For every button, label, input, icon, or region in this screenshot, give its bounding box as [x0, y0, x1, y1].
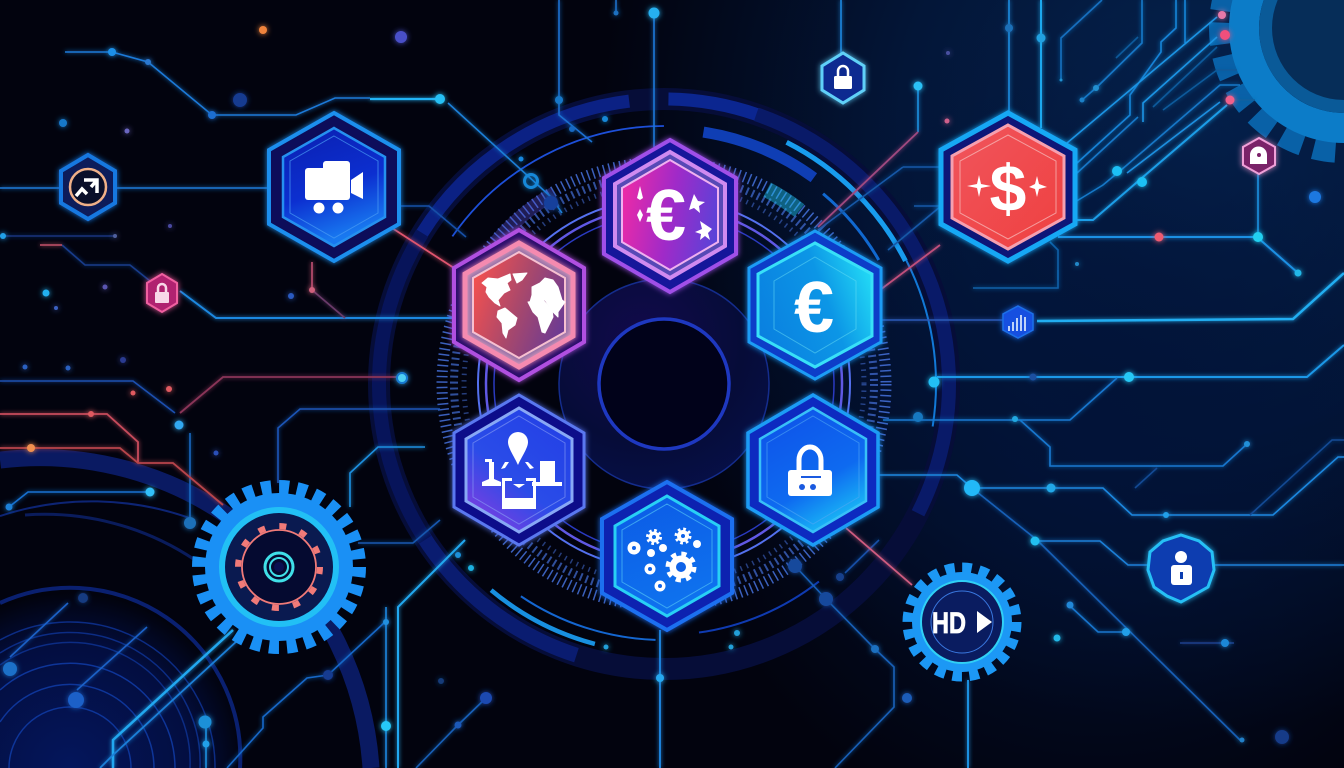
dollar symbol: $ [990, 151, 1026, 225]
small hexagon: right lock [1243, 138, 1275, 174]
hexagon: padlock [748, 395, 878, 545]
decorative arcs bottom left [0, 458, 371, 768]
icon: lock [155, 284, 169, 303]
icon: lock [834, 66, 852, 89]
small hexagon: pink lock [147, 274, 177, 312]
small hexagon: top lock [822, 53, 864, 103]
gear: target [199, 487, 359, 647]
central ring system [270, 0, 1058, 768]
target core [265, 553, 293, 581]
sparkle stars [637, 186, 712, 240]
tick rings [354, 74, 974, 694]
sparkle stars [967, 175, 1047, 197]
label HD: HD [932, 607, 966, 640]
euro symbol: € [794, 268, 834, 348]
hexagon: cyan euro [749, 231, 881, 379]
badge: person [1148, 535, 1214, 602]
icon: person [1171, 551, 1192, 585]
hexagon: pink euro [604, 140, 736, 292]
gear: top right corner [1220, 0, 1344, 152]
hexagon: dollar [941, 113, 1075, 261]
icon: video camera [305, 161, 363, 214]
circuit lines pink [0, 132, 940, 585]
play triangle [977, 611, 992, 633]
hexagon: world map [454, 230, 584, 380]
gear: HD play [908, 568, 1016, 676]
hexagon: location and boxes [454, 395, 584, 545]
icon: arrows in ring [70, 169, 106, 205]
icon: world map [482, 273, 565, 338]
small hexagon: arrow badge [61, 155, 115, 219]
icon: bars [1009, 315, 1025, 331]
icon: padlock [788, 447, 832, 496]
small hexagon: bar chart badge [1003, 306, 1033, 338]
icon: gears cluster [628, 530, 701, 592]
hexagon: gears [602, 482, 732, 630]
icon: lock [1250, 146, 1267, 164]
icon: location pin and pillars [482, 432, 562, 509]
pink inner cog [238, 526, 320, 608]
outer band segments [270, 0, 1058, 768]
euro symbol: € [646, 176, 686, 256]
hexagon: video camera [269, 113, 399, 261]
